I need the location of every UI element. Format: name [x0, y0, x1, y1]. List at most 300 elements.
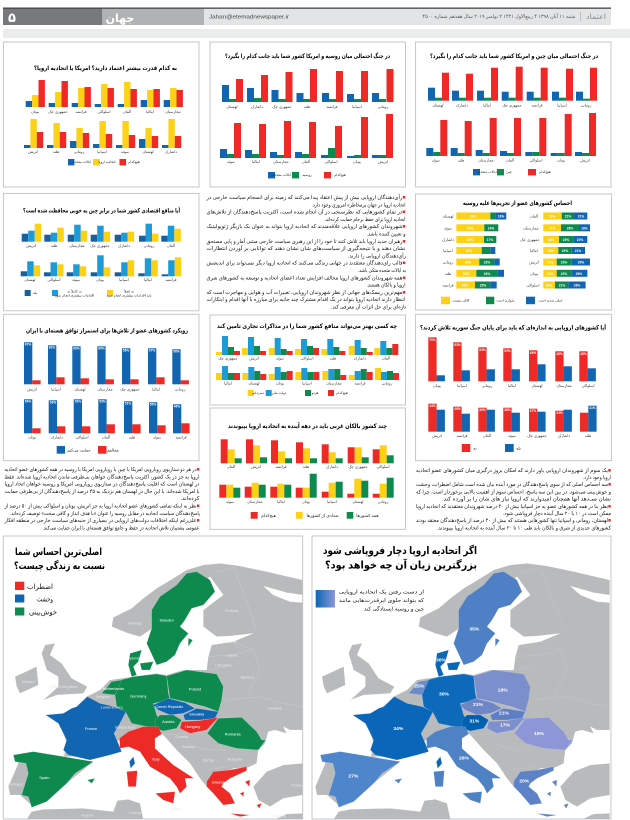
row labels right column: اسلواکی [526, 284, 540, 288]
stacked bar values: 26% [576, 272, 582, 276]
country labels row 2: مجارستان [478, 158, 494, 162]
text block: middle commentary: به ایالات متحده متکی باشد. [358, 267, 406, 274]
legend: ایالات متحده [478, 170, 497, 174]
legend: اقدامات بیشتری انجام شود [55, 294, 94, 298]
map of Europe coloured by share: 30% [436, 658, 447, 664]
map of Europe coloured by feeling: Estonia [223, 639, 237, 644]
map of Europe coloured by feeling: Switzerland [115, 725, 135, 730]
country labels row 2: رومانی [74, 150, 85, 154]
panel: EU collapse map [312, 536, 611, 819]
map of Europe coloured by feeling: France [85, 726, 98, 731]
map of Europe coloured by feeling: Lithuania [215, 662, 232, 667]
text block: right commentary: کشورهای جدیدی از شرق و بالکان باید طی ۱۰ تا ۲۰ سال آینده به اتحادیه اروپا بپیوندند. [437, 524, 611, 531]
legend [57, 446, 119, 454]
stacked bar values: 23% [561, 260, 567, 264]
newspaper header band: ۵ [8, 10, 16, 25]
map heading: نسبت به زندگی چیست؟ [14, 559, 105, 572]
country labels row 2: اسپانیا [302, 382, 312, 386]
country labels row 1: آلمان [227, 464, 236, 469]
map legend: gradient swatch and caption: از دست رفتن یک اتحادیه اروپایی [339, 588, 424, 596]
legend [462, 444, 521, 452]
country labels row 2 [227, 159, 388, 164]
country labels row 1: آلمان [382, 356, 391, 360]
country labels row 1: دانمارک [326, 464, 338, 469]
map legend: وحشت [37, 596, 53, 604]
stacked bar values: 29% [578, 260, 584, 264]
country labels row 1: اتریش [27, 388, 37, 392]
row labels left column: هلند [445, 272, 451, 276]
country labels row 2: اسپانیا [97, 150, 107, 154]
map of Europe coloured by feeling: Bosnia [182, 744, 195, 749]
map of Europe coloured by feeling: Hungary [185, 724, 200, 729]
country labels row 1: اسلواکی [376, 465, 390, 469]
country labels row 1: اتریش [249, 356, 259, 360]
stacked bar values: 24% [548, 238, 554, 242]
bar values row 1: 57% [149, 348, 155, 352]
text block: right commentary: ■سه احساس اصلی که از سوی پاسخ‌دهندگان در مورد آینده بیان شده است شامل اضطراب، وحشت [416, 481, 611, 488]
country labels row 2: جمهوری چک [527, 434, 547, 438]
bar values row 1: 70% [429, 338, 436, 342]
bars row 1 [428, 67, 597, 101]
map of Europe coloured by share: 30% [439, 691, 450, 697]
legend: ایالات متحده [73, 160, 91, 164]
country labels row 1: رومانی [482, 384, 493, 388]
bar values row 1 [429, 338, 587, 356]
stacked bar values: 21% [559, 284, 565, 288]
text block: middle commentary: ■رأی‌دهندگان اروپایی بیش از پیش اعتقاد پیدا می‌کنند که زمینه برای انسجام سیاست خارجی در [206, 193, 406, 201]
country labels row 1: فرانسه [326, 105, 338, 109]
text block: lower left commentary: ■علی‌رغم اینکه اختلافات دولت‌های اروپایی در بسیاری از جنبه‌های سیاست خارجی در منطقه افکار [4, 517, 199, 524]
country labels row 1: اتریش [251, 465, 261, 469]
country labels row 1 [27, 388, 186, 392]
bars row 1 [221, 439, 394, 463]
map of Europe coloured by feeling: Austria [162, 719, 175, 724]
map legend: خوش‌بینی [29, 610, 57, 616]
text block: middle commentary: اتحادیه اروپا در جهان پرمخاطره امروزی وجود دارد. [312, 202, 406, 208]
country labels row 2: لهستان [352, 500, 364, 504]
stacked bars left column [456, 212, 506, 288]
text block: middle commentary: اروپا و بالکان هستند. [366, 282, 406, 289]
text block: middle commentary: نشان دهند و با نتیجه‌گیری از سیاست‌های شان نشان دهند که توانایی بر آوردن انتظارات [206, 245, 406, 252]
stacked bar values: 41% [466, 249, 472, 253]
text block: right commentary: ■لهستان، رومانی و اسپانیا تنها کشورهایی هستند که بیش از ۴۰ درصد از پاسخ‌دهندگان معتقد بودند [416, 517, 611, 524]
text block: lower left commentary: پاسخ‌دهندگان سیاست اتحادیه در مقابل روسیه را عنوان «با هدف انداز و کافی سخت» توصیف کرده‌اند. [10, 510, 200, 517]
panel: sanctions on Russia [416, 194, 612, 310]
bar values row 1: 56% [173, 350, 180, 354]
country labels row 2: سوئد [227, 160, 235, 164]
country labels row 1: رومانی [378, 105, 389, 109]
bars row 2 [219, 474, 394, 498]
stacked bar values: 29% [549, 214, 555, 218]
country labels row 1: لهستان [531, 384, 543, 388]
stacked bar values: 42% [467, 238, 473, 242]
country labels row 1: اتریش [26, 244, 36, 248]
country labels row 2 [432, 158, 590, 162]
country labels row 1: جمهوری چک [218, 356, 238, 360]
map of Europe coloured by feeling: Malta [171, 807, 182, 812]
panel: Western Balkans accession: چند کشور بالکان غربی باید در دهه آینده به اتحادیه اروپا بپیوندند [228, 421, 387, 430]
map of Europe coloured by feeling: Belarus [241, 675, 254, 680]
country labels row 2: آلمان [102, 434, 111, 440]
country labels row 1: جمهوری چک [90, 244, 110, 248]
stacked bar values: 22% [562, 249, 568, 253]
text block: middle commentary: ■رهبران جدید اروپا باید تلاش کنند تا خود را از این رهبری سیاست خارجی مبتنی آمار و پایی مستحق [206, 238, 406, 245]
bars row 2 [216, 366, 399, 380]
stacked bar values [462, 214, 588, 288]
bars row 2 [24, 119, 181, 148]
text block: lower left commentary: ■نظر به اینکه تمامی کشورهای عضو اتحادیه اروپا به جز اتریش، یونان و اسلواکی بیش از ۵۰ درصد از [4, 502, 199, 510]
country labels row 1: جمهوری چک [48, 110, 68, 114]
country labels row 1 [433, 384, 595, 388]
map of Europe coloured by share: 34% [393, 726, 404, 732]
country labels row 2: ایتالیا [224, 382, 232, 386]
bar values row 1: 63% [454, 343, 461, 347]
text block: right commentary: نشان می‌دهد آنها همچنان امیدوارند که اروپا نیاز های شان را بر آورده کند. [442, 496, 612, 503]
map legend: gradient swatch and caption: چین و روسیه ایستادگی کند [364, 606, 424, 612]
country labels row 2: هلند [585, 434, 591, 438]
legend: خیلی شدید است [538, 298, 563, 302]
text block: right commentary [416, 467, 612, 531]
text block: middle commentary: ■قالب رای‌دهندگان معتقدند در جهانی زندگی می‌کنند که اتحادیه اروپا دیگر نمی‌تواند برای اندیشش [206, 260, 406, 267]
country labels row 2: لهستان [248, 382, 260, 386]
legend: نه [473, 446, 477, 450]
map of Europe coloured by share: 26% [459, 756, 470, 762]
bars row 2 [220, 114, 393, 158]
stacked bar values: 27% [549, 226, 555, 230]
country labels row 2: مجارستان [273, 160, 289, 164]
map of Europe coloured by feeling: Finland [225, 608, 238, 613]
stacked bar values: 33% [463, 272, 469, 276]
stacked bar values: 28% [567, 226, 573, 230]
text block: middle commentary: اتحادیه اروپا برای حفظ برجام حمایت کرده‌اند. [324, 216, 406, 223]
country labels row 2: یونان [276, 382, 284, 386]
country labels row 1: فرانسه [275, 465, 287, 469]
map of Europe coloured by share: 21% [499, 710, 510, 716]
stacked bar values: 23% [563, 238, 569, 242]
country labels row 2: سوئد [72, 278, 80, 282]
legend: مخالفم [107, 448, 119, 452]
country labels row 1: لهستان [74, 388, 86, 392]
legend: اتحادیه اروپا [98, 160, 116, 164]
country labels row 1: آلمان [123, 109, 132, 114]
map of Europe coloured by feeling: Greece [212, 780, 226, 785]
stacked bars right column [543, 212, 590, 288]
map of Europe coloured by feeling: Serbia [203, 757, 215, 762]
text block: middle commentary: ■در تمام کشورهایی که نظرسنجی در آن انجام شده است، اکثریت پاسخ‌دهندگان از تلاش‌های [206, 209, 406, 216]
map of Europe coloured by feeling: Czech Republic [155, 704, 183, 709]
text block: right commentary: اروپا وجود دارد. [583, 475, 611, 481]
legend: هیچ‌کدام [261, 513, 277, 518]
bars row 2 [24, 399, 190, 433]
bars row 2 [426, 113, 596, 156]
bar values row 1: 49% [530, 351, 536, 355]
map of Europe coloured by feeling: Slovakia [189, 712, 205, 717]
country labels row 2: رومانی [382, 382, 393, 386]
map legend: gradient swatch and caption [316, 588, 425, 612]
text block: right commentary: ■یک سوم از شهروندان اروپایی باور دارند که امکان بروز درگیری میان کشورهای عضو اتحادیه [416, 467, 611, 474]
legend: هیچ‌کدام [128, 160, 140, 165]
country labels row 1: رومانی [175, 388, 186, 392]
country labels row 1 [226, 104, 389, 109]
country labels row 1: دانمارک [354, 356, 366, 360]
map of Europe coloured by share [315, 563, 610, 819]
country labels row 2: هلند [53, 150, 59, 154]
country labels row 2: سوئد [432, 158, 440, 162]
text block: lower left commentary: ■در هر دو سناریوی رویارویی امریکا با چین یا رویارویی امریکا با روسیه در همه کشورهای عضو اتحادیه [4, 466, 200, 473]
country labels row 1: سوئد [276, 356, 284, 360]
bar values row 2: 53% [50, 400, 56, 404]
row labels right column: آلمان [530, 214, 539, 218]
bar values row 2: 53% [75, 400, 81, 404]
bar values row 1: 53% [504, 349, 511, 353]
map of Europe coloured by feeling: Sweden [159, 617, 174, 622]
text block: lower left commentary: عمومی پشتیبان تلاش اتحادیه در حفظ و جامع توافق هسته‌ای با ایران حمایت می‌کند. [42, 524, 200, 531]
country labels row 2: فرانسه [175, 436, 187, 440]
country labels row 2: یونان [557, 158, 565, 162]
country labels row 1: هلند [303, 465, 309, 469]
map of Europe coloured by share: 20% [519, 778, 530, 784]
text block: middle commentary: تازه‌ای برای حل اثرات آن معرفی کند. [331, 304, 406, 310]
country labels row 2: یونان [353, 160, 361, 164]
row labels left column: سوئد [444, 226, 452, 230]
map of Europe coloured by feeling: Denmark [127, 656, 143, 661]
country labels row 2: اسلواکی [75, 436, 89, 440]
bar values row 2: 53% [99, 400, 106, 404]
country labels row 2: اتریش [580, 158, 590, 162]
bars row 1 [26, 80, 183, 107]
map of Europe coloured by feeling: Romania [225, 731, 241, 736]
newspaper header band: شنبه ۱۱ آبان ۱۳۹۸ ۴ ربیع‌الاول ۱۴۴۱ ۲ نوامبر ۲۰۱۹ سال هفدهم شماره ۴۵۰۰ [422, 13, 576, 20]
legend: هردو [310, 391, 319, 395]
stacked bar values: 19% [546, 284, 552, 288]
country labels row 1 [218, 356, 391, 360]
country labels row 2: لهستان [142, 150, 154, 154]
legend [473, 169, 551, 175]
bar values row 1: 48% [556, 352, 563, 356]
bar values row 2: 51% [125, 402, 131, 406]
legend: نه اصلاً [123, 289, 134, 293]
text block: lower left commentary: با امریکا شده‌اند. با این حال در لهستان هم نزدیک به ۴۵ درصد از پاسخ‌دهندگان از بی‌طرفی حمایت [4, 488, 200, 495]
country labels row 2: مجارستان [326, 382, 342, 386]
legend [25, 289, 152, 298]
map of Europe coloured by share: 17% [500, 723, 511, 729]
country labels row 1: اسپانیا [51, 388, 61, 392]
country labels row 2: هلند [129, 436, 135, 440]
legend: کافی نیست [453, 298, 470, 302]
panel: economic interests against China: آیا منافع اقتصادی کشور شما در برابر چین به خوبی محافظت شده است؟ [23, 206, 181, 215]
bar values row 1 [25, 342, 180, 354]
map of Europe coloured by feeling: Turkey [291, 782, 303, 787]
map of Europe coloured by share: 27% [348, 773, 359, 779]
bar values row 2: 41% [589, 406, 596, 410]
legend: باید اقدامات بیشتری انجام شود [106, 294, 152, 298]
map of Europe coloured by feeling: Spain [39, 775, 49, 780]
text block: middle commentary: و تعیین کننده باشد. [366, 230, 406, 238]
country labels row 1: جمهوری چک [502, 104, 522, 108]
country labels row 2: فرانسه [354, 382, 366, 386]
country labels row 2: اسلواکی [324, 160, 338, 164]
map of Europe coloured by feeling: Norway [128, 621, 142, 626]
country labels row 1: رومانی [581, 104, 592, 108]
bar values row 2: 50% [150, 402, 156, 406]
stacked bar values: 21% [547, 260, 553, 264]
stacked bar values: 28% [574, 284, 580, 288]
map of Europe coloured by share: 31% [469, 718, 480, 724]
legend: تعدادی از کشورها [306, 513, 339, 518]
country labels row 1: هلند [51, 244, 57, 248]
map heading: بزرگترین زیان آن چه خواهد بود؟ [325, 558, 477, 572]
bar values row 2 [429, 404, 596, 415]
legend: هیچ‌کدام [334, 173, 346, 178]
country labels row 1: هلند [330, 356, 336, 360]
map of Europe coloured by feeling: Poland [189, 686, 201, 691]
text block: right commentary: ممکن است در ۱۰ یا ۲۰ سال آینده دچار فروپاشی شود. [503, 510, 611, 517]
country labels row 2: رومانی [378, 500, 389, 504]
country labels row 2 [28, 149, 177, 154]
country labels row 1: مجارستان [165, 110, 181, 114]
bar values row 2: 46% [174, 404, 180, 408]
panel: trade negotiations: چه کسی بهتر می‌تواند منافع کشور شما را در مذاکرات تجاری تامین کند [217, 323, 397, 330]
country labels row 2: دانمارک [558, 433, 570, 438]
legend: هیچ‌کدام [336, 391, 348, 396]
country labels row 1: ایتالیا [483, 104, 491, 108]
panel: Russia vs America conflict: در جنگ احتمالی میان روسیه و امریکا کشور شما باید جانب کدام را بگیرد؟ [225, 52, 390, 60]
country labels row 1: ایتالیا [146, 110, 154, 114]
text block: lower left commentary: در لهستان است که اقلیت پاسخ‌دهندگان در سناریوی رویارویی امریکا و روسیه خواهان اتحاد اروپا [4, 481, 200, 488]
row labels left column: دانمارک [442, 237, 454, 242]
map of Europe coloured by feeling: Belgium [96, 694, 111, 699]
stacked bar values: 18% [498, 214, 504, 218]
legend: نمی‌دانم [252, 391, 264, 395]
bar values row 2: 54% [25, 400, 31, 404]
row labels right column: اتریش [529, 260, 539, 264]
country labels row 1: آلمان [167, 243, 176, 248]
bar values row 2 [25, 400, 180, 408]
map of Europe coloured by share: 21% [473, 702, 484, 708]
map of Europe coloured by feeling: Italy [152, 757, 160, 762]
legend: بله [516, 446, 521, 450]
stacked bar values: 23% [480, 284, 486, 288]
country labels row 2: یونان [96, 278, 104, 282]
country labels row 1: هلند [304, 105, 310, 109]
row labels right column: ایتالیا [530, 249, 538, 253]
map of Europe coloured by feeling [8, 563, 303, 819]
text block: middle commentary: ■شهروندان کشورهای اروپایی علاقه‌مندند که اتحادیه اروپا بتواند به عنوان یک بازیگر ژئوپولیتیک [206, 223, 406, 230]
map of Europe coloured by feeling: Croatia [175, 734, 189, 739]
stacked bar values: 23% [561, 272, 567, 276]
row labels right column: یونان [530, 272, 538, 276]
legend: چین [506, 170, 512, 174]
country labels row 1: لهستان [226, 105, 238, 109]
legend: نه کاملاً نه [67, 289, 82, 293]
country labels row 2: اسپانیا [327, 500, 337, 504]
bars row 1 [22, 224, 181, 242]
map heading [14, 547, 105, 572]
country labels row 1: مجارستان [97, 388, 113, 392]
country labels row 2: سوئد [226, 500, 234, 504]
row labels right column: جمهوری چک [520, 238, 540, 242]
country labels row 1: دانمارک [251, 104, 263, 109]
panel: Syria war [416, 314, 612, 461]
stacked bar values: 34% [484, 272, 490, 276]
country labels row 1 [227, 464, 390, 469]
map heading: اگر اتحادیه اروپا دچار فروپاشی شود [323, 544, 477, 557]
stacked bar values: 16% [581, 226, 588, 230]
bar values row 2: 37% [530, 409, 536, 413]
stacked bar values: 52% [470, 214, 476, 218]
country labels row 1: جمهوری چک [272, 105, 292, 109]
legend: متوازن است [496, 298, 515, 302]
map of Europe coloured by feeling: Tunisia [129, 810, 142, 815]
map of Europe coloured by feeling: Ukraine [268, 706, 283, 711]
country labels row 2: فرانسه [165, 278, 177, 282]
stacked bar values: 23% [484, 260, 490, 264]
legend: روسیه [302, 173, 312, 177]
country labels row 1: اسپانیا [457, 384, 467, 388]
text block: middle commentary: ■همه شهروندان کشورهای اروپا مخالف افزایش تعداد اعضای اتحادیه و توسعه به کشورهای شرق [206, 274, 406, 281]
country labels row 2: سوئد [508, 434, 516, 438]
country labels row 2: آلمان [506, 158, 515, 162]
country labels row 1: اسلواکی [581, 384, 595, 388]
stacked bar values: 22% [577, 238, 583, 242]
panel: trust in US or EU: به کدام قدرت بیشتر اعتماد دارید؟ امریکا یا اتحادیه اروپا؟ [34, 65, 177, 72]
map of Europe coloured by feeling: Luxembourg [101, 705, 123, 710]
bars row 1 [216, 336, 398, 355]
text block: middle commentary: ■مهم‌ترین ریسک‌های جهانی از نظر شهروندان اروپایی، تغییرات آب و هوایی و مهاجرت است که [206, 289, 406, 296]
country labels row 2 [432, 433, 591, 438]
country labels row 2: آلمان [302, 159, 311, 164]
legend [68, 159, 140, 165]
country labels row 1: یونان [433, 384, 441, 388]
legend: حمایت می‌کنم [67, 448, 91, 452]
stacked bar values: 21% [575, 249, 581, 253]
newspaper header band: جهان [106, 13, 134, 25]
map of Europe coloured by feeling: Latvia [226, 652, 238, 657]
legend: دولت ملی [272, 391, 287, 395]
bar values row 2: 40% [454, 407, 461, 411]
bar values row 2: 34% [556, 411, 563, 415]
bar values row 2: 44% [429, 404, 436, 408]
text block: lower left commentary: کرده‌اند. [180, 495, 200, 502]
bars row 1 [222, 69, 394, 102]
country labels row 2: فرانسه [456, 434, 468, 438]
country labels row 2: اتریش [432, 434, 442, 438]
map of Europe coloured by feeling: United Kingdom [49, 684, 78, 689]
stacked bar values: 14% [488, 226, 494, 230]
text block: middle commentary: انتظار دارند اتحادیه اروپا بتواند در یک اقدام مشترک چند جانبه برای مبارزه با آنها اقدام و ابتکارات [206, 296, 406, 303]
text block: lower left commentary [4, 466, 200, 531]
legend [248, 390, 348, 396]
panel: Russia vs America conflict [210, 42, 406, 187]
legend [251, 512, 379, 519]
map of Europe coloured by share: 19% [498, 687, 508, 693]
country labels row 2 [226, 500, 389, 504]
country labels row 1: ایتالیا [508, 384, 516, 388]
country labels row 1: رومانی [144, 244, 155, 248]
stacked bar values: 21% [565, 214, 571, 218]
legend: بله [33, 291, 37, 295]
country labels row 1: دانمارک [118, 243, 130, 248]
country labels row 2: یونان [28, 436, 36, 440]
bar values row 1: 54% [479, 348, 486, 352]
panel: Iran nuclear deal [3, 314, 199, 461]
panel: Western Balkans accession [210, 408, 406, 529]
country labels row 1: اسلواکی [300, 356, 314, 360]
bars row 1 [428, 337, 596, 381]
map of Europe coloured by feeling: Germany [130, 693, 147, 698]
panel: economic interests against China [3, 193, 199, 311]
country labels row 1: لهستان [432, 104, 444, 108]
